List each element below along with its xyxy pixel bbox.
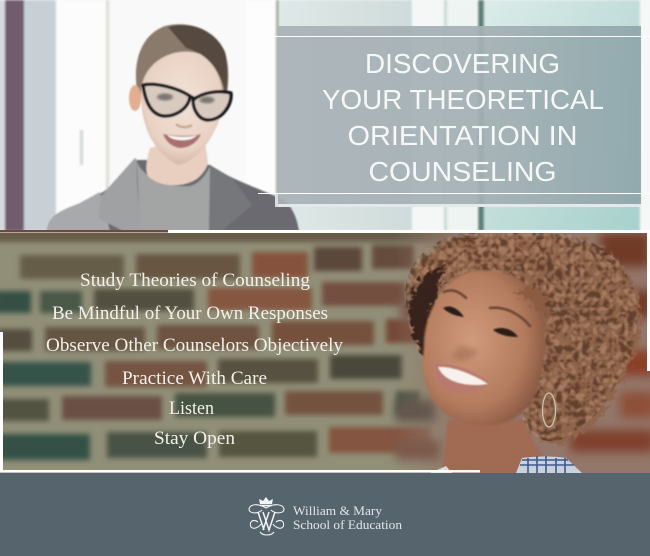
woman 1 figure: [47, 24, 299, 231]
title: YOUR THEORETICAL: [322, 84, 604, 115]
right-side wall: [395, 233, 650, 473]
list of tips: Practice With Care: [122, 369, 267, 389]
photo: smiling woman in front of brick wall: [0, 225, 650, 473]
institution name: William & Mary: [293, 503, 383, 518]
earring: [542, 393, 556, 427]
eyes: [443, 306, 464, 317]
title: COUNSELING: [368, 156, 556, 187]
list of tips: Study Theories of Counseling: [80, 271, 310, 291]
glasses: [143, 84, 231, 120]
jacket: [100, 159, 300, 230]
photo: woman with glasses in bright office: [0, 0, 650, 231]
list of tips: Observe Other Counselors Objectively: [46, 336, 344, 356]
list of tips: Listen: [169, 399, 214, 419]
woman 2 figure: [400, 225, 645, 473]
lapels: [98, 158, 141, 231]
institution name: School of Education: [293, 517, 403, 532]
footer band: [0, 473, 650, 556]
brows: [444, 290, 530, 326]
hair mass: [400, 225, 645, 450]
hair: [136, 24, 228, 100]
brick wall: [0, 238, 453, 473]
nose: [453, 345, 478, 360]
icon: William and Mary royal cypher: [249, 497, 284, 535]
list of tips: [46, 271, 344, 449]
neck: [145, 146, 208, 186]
blouse: [516, 456, 582, 473]
white frame lines: [0, 230, 650, 472]
ear: [129, 85, 141, 111]
sweater: [137, 162, 211, 231]
institution name: [293, 503, 403, 532]
title panel: [258, 26, 650, 207]
eyes: [157, 93, 173, 101]
list of tips: Be Mindful of Your Own Responses: [52, 304, 328, 324]
hair overlap on forehead: [510, 285, 546, 315]
face: [423, 270, 545, 426]
mouth: [434, 364, 490, 393]
face: [141, 52, 223, 165]
lips and teeth: [163, 134, 201, 148]
title: DISCOVERING: [365, 48, 560, 79]
nose: [176, 124, 192, 127]
neck: [442, 420, 544, 473]
title: ORIENTATION IN: [348, 120, 578, 151]
list of tips: Stay Open: [154, 429, 235, 449]
title: [322, 48, 604, 187]
